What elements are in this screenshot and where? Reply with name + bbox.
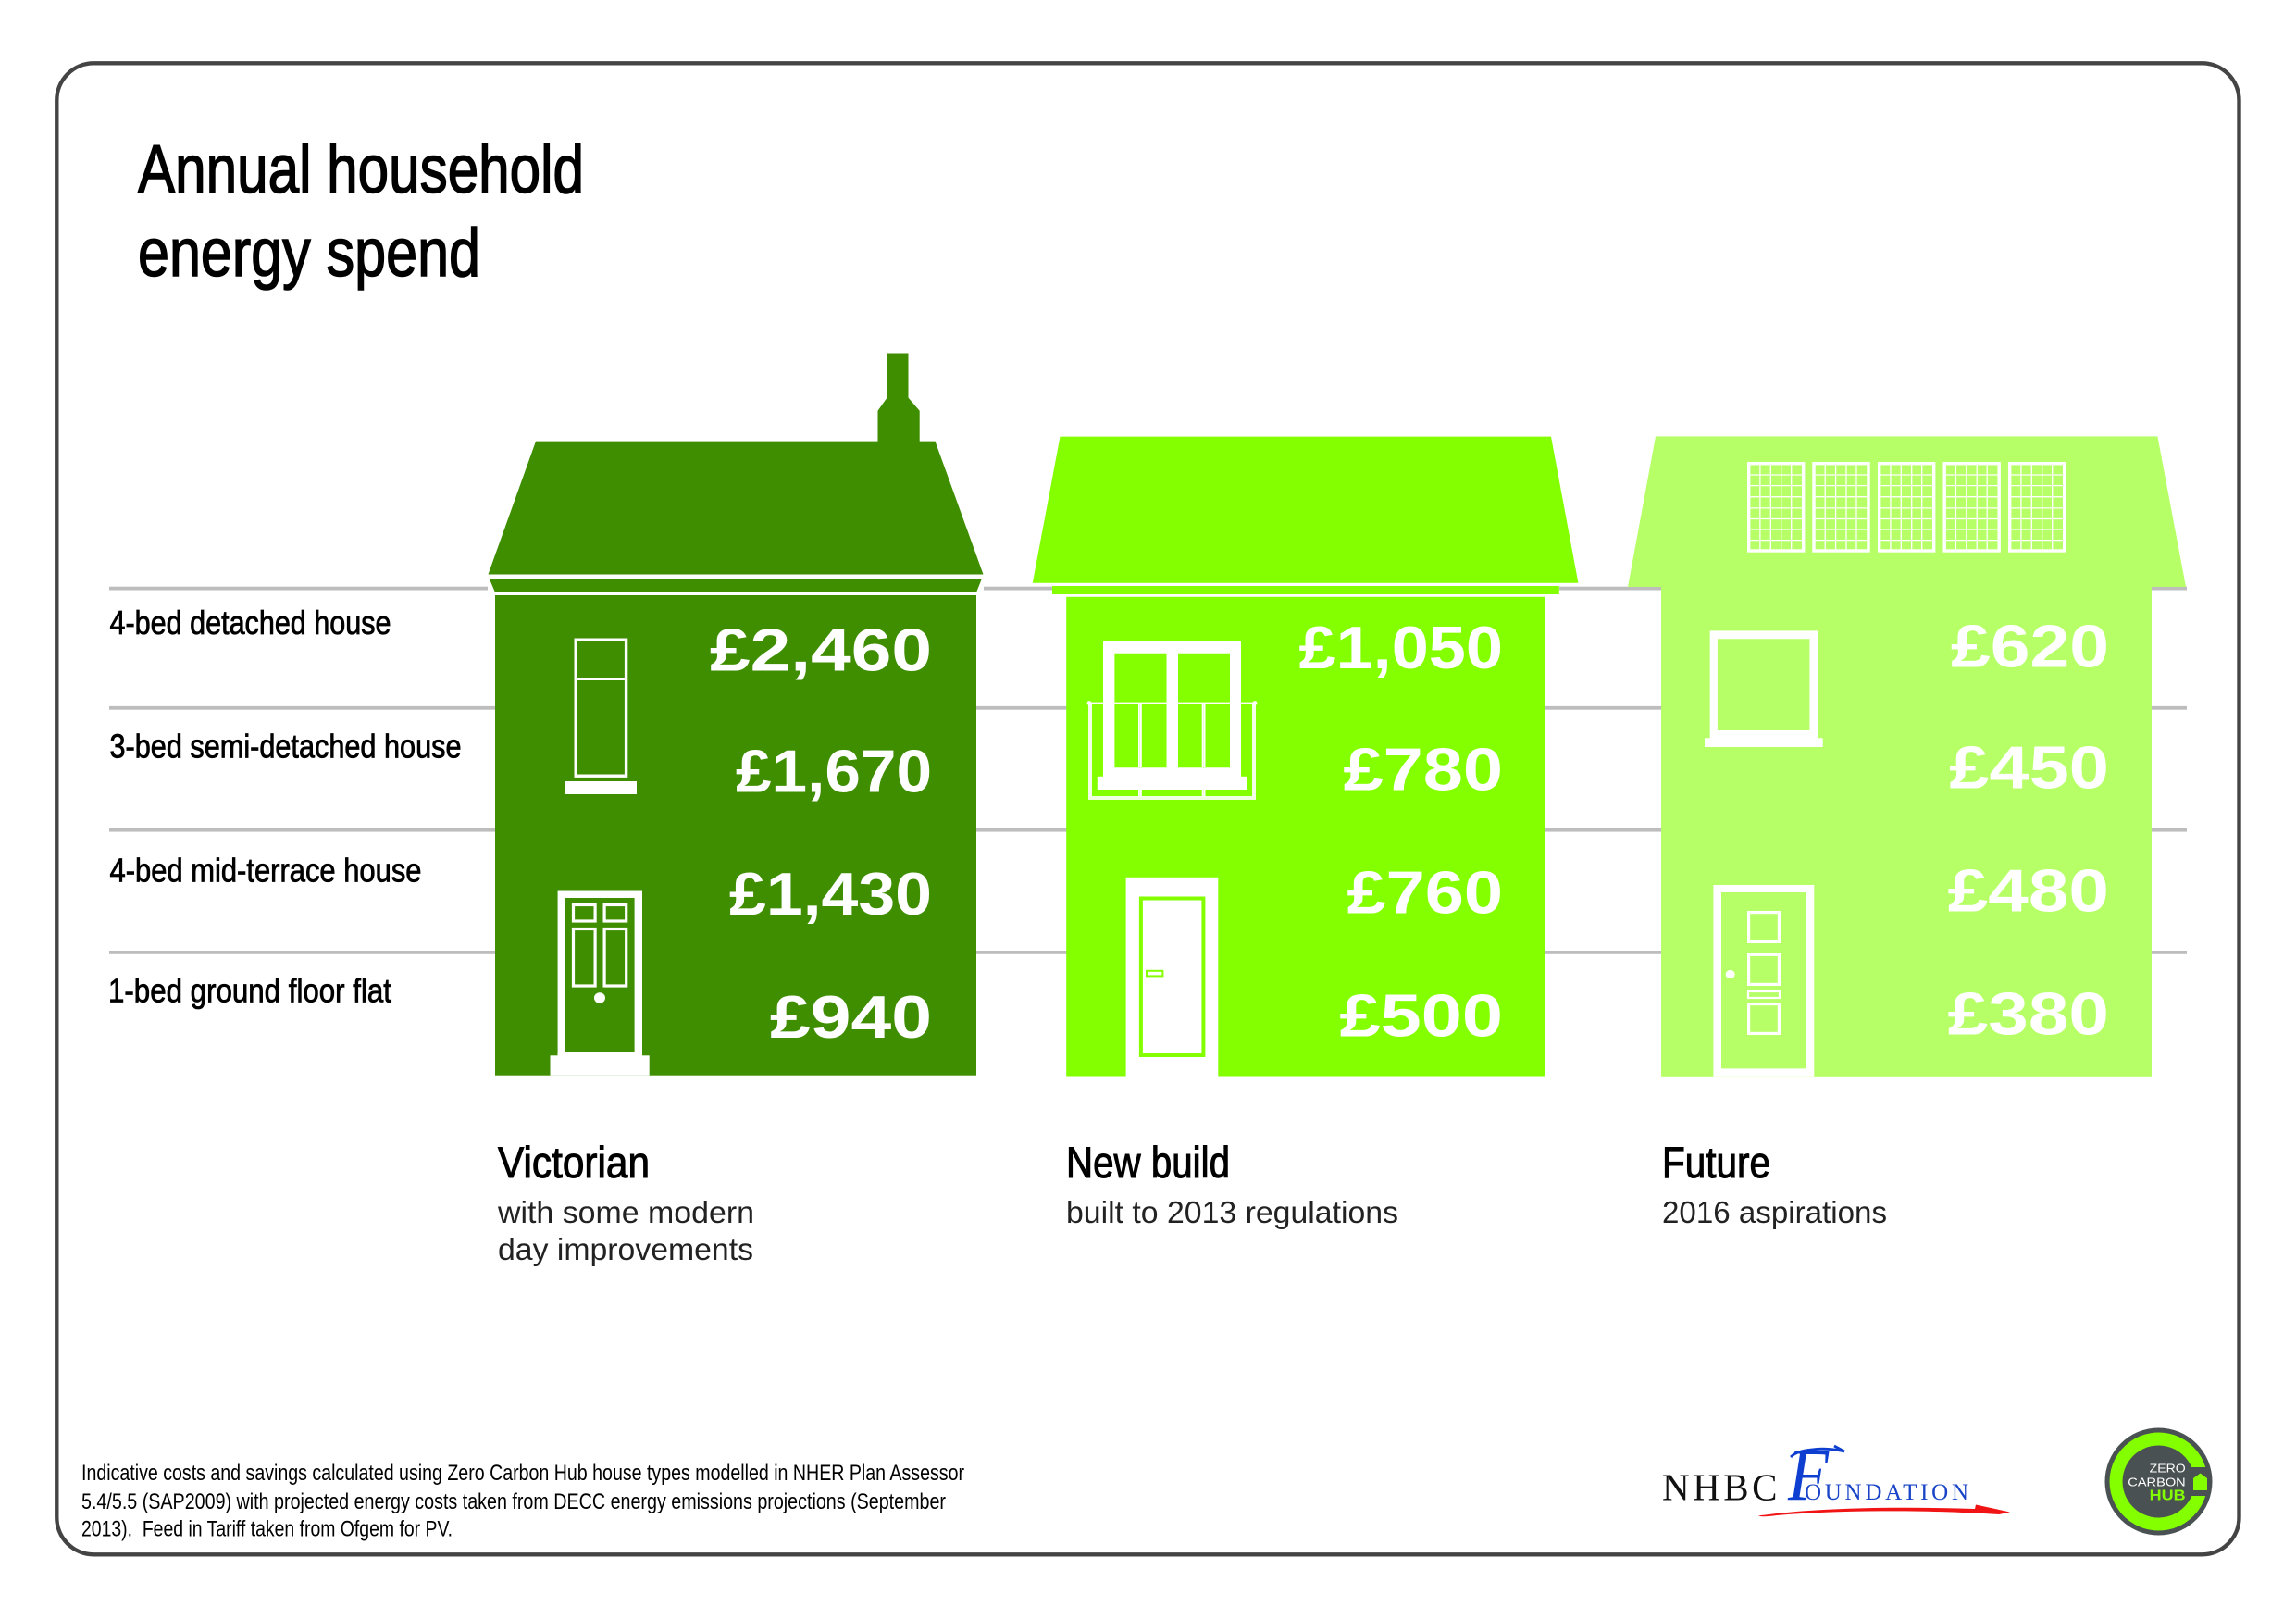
title: energy spend — [138, 216, 480, 291]
roof — [1033, 437, 1578, 583]
house: Future — [1628, 436, 2186, 1077]
roof — [1628, 436, 2186, 587]
icon: square window — [1705, 630, 1823, 747]
prices: Future: £380 — [1948, 980, 2109, 1048]
logo: NHBC Foundation: OUNDATION — [1805, 1480, 1968, 1505]
caption: Victorian: day improvements — [498, 1232, 753, 1266]
prices: Future — [1948, 613, 2109, 1048]
caption: Future: Future — [1662, 1138, 1770, 1187]
logo: NHBC Foundation: NHBC — [1662, 1466, 1777, 1509]
prices: New build: £760 — [1347, 859, 1503, 926]
logo: NHBC Foundation: F — [1787, 1435, 1830, 1516]
icon: solar panels — [1749, 464, 2065, 551]
icon: sash window — [565, 640, 637, 794]
footnote: Indicative costs and savings calculated using Zero Carbon Hub house types modelled in NHER Plan Assessor — [81, 1461, 964, 1486]
row labels — [108, 604, 461, 1009]
footnote: 5.4/5.5 (SAP2009) with projected energy costs taken from DECC energy emissions projections (September — [81, 1489, 946, 1514]
prices: Victorian: £1,430 — [729, 860, 932, 928]
prices: New build — [1299, 614, 1503, 1050]
icon: panelled front door — [550, 890, 650, 1076]
prices: New build: £1,050 — [1299, 614, 1503, 681]
prices: Victorian: £940 — [770, 983, 932, 1051]
caption: New build: built to 2013 regulations — [1066, 1195, 1398, 1229]
caption: Victorian: Victorian — [498, 1138, 650, 1187]
logo: Zero Carbon Hub: ZERO — [2150, 1463, 2186, 1476]
label: 1-bed ground floor flat: 1-bed ground floor flat — [108, 972, 391, 1009]
title: Annual household — [138, 132, 584, 207]
prices: New build: £780 — [1344, 735, 1503, 803]
caption: Future: 2016 aspirations — [1662, 1195, 1887, 1229]
logo: Zero Carbon Hub: CARBON — [2128, 1476, 2186, 1489]
roof and chimney — [489, 354, 983, 574]
label: 4-bed detached house: 4-bed detached house — [109, 604, 391, 641]
eaves band — [490, 579, 982, 592]
icon: modern front door — [1126, 878, 1218, 1076]
prices: New build: £500 — [1340, 981, 1503, 1050]
label: 4-bed mid-terrace house: 4-bed mid-terrace house — [109, 852, 422, 889]
house gap backing — [1052, 582, 1559, 597]
caption: Future — [1662, 1138, 1887, 1229]
house: New build — [1033, 437, 1578, 1077]
caption: New build: New build — [1066, 1138, 1230, 1187]
logo: Zero Carbon Hub — [2104, 1427, 2212, 1535]
eaves band — [1052, 586, 1559, 594]
prices: Future: £450 — [1949, 733, 2109, 801]
prices: Future: £480 — [1948, 857, 2109, 924]
house gap backing — [488, 574, 984, 596]
body — [1661, 583, 2152, 1077]
caption: Victorian — [497, 1138, 754, 1266]
title — [138, 132, 584, 291]
body — [1066, 597, 1545, 1076]
prices: Victorian: £2,460 — [710, 616, 932, 683]
logo: NHBC Foundation — [1662, 1435, 2010, 1516]
logo: Zero Carbon Hub: HUB — [2150, 1488, 2186, 1504]
label: 3-bed semi-detached house: 3-bed semi-detached house — [109, 727, 461, 765]
house: Victorian — [488, 354, 984, 1076]
prices: Victorian: £1,670 — [736, 737, 932, 804]
caption: New build — [1066, 1138, 1398, 1229]
footnote — [81, 1461, 964, 1542]
grid lines for house types — [109, 587, 2187, 954]
footnote: 2013). Feed in Tariff taken from Ofgem for PV. — [81, 1516, 453, 1542]
caption: Victorian: with some modern — [497, 1195, 754, 1229]
body — [495, 595, 976, 1076]
icon: window with juliet balcony — [1087, 641, 1257, 799]
prices: Future: £620 — [1951, 613, 2109, 679]
prices: Victorian — [710, 616, 932, 1051]
icon: future front door — [1713, 885, 1814, 1077]
